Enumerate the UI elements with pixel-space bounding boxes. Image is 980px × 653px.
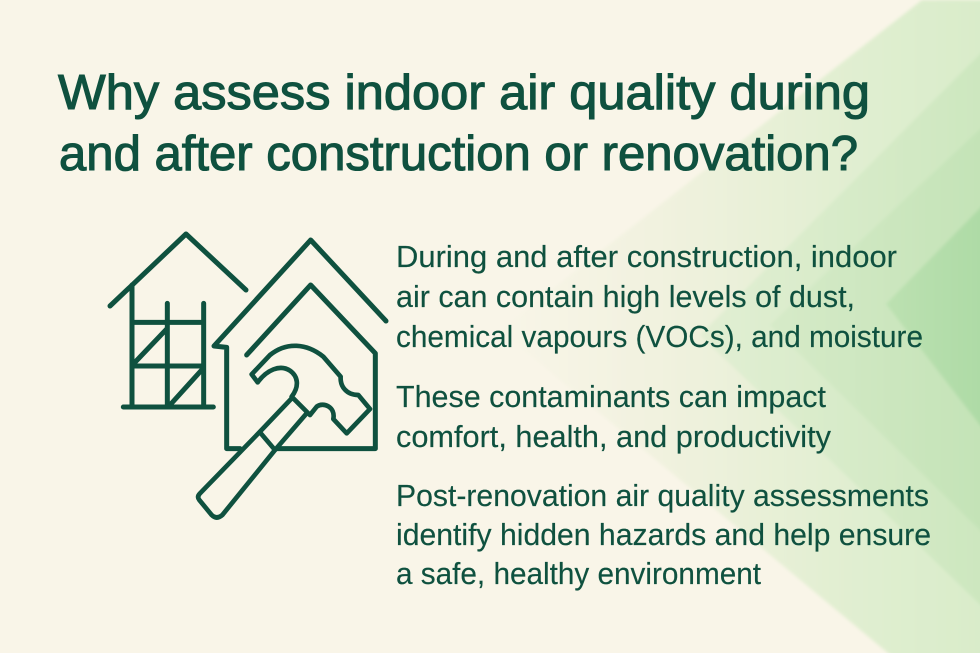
icon: scaffold house <box>110 234 246 407</box>
text block: assessments: identify hidden hazards and help ensure <box>396 517 931 552</box>
title: and after construction or renovation? <box>59 127 858 181</box>
text block: assessments: a safe, healthy environment <box>396 556 761 591</box>
text block: impact: comfort, health, and productivity <box>396 419 831 454</box>
text block: contaminants during construction: air can contain high levels of dust, <box>396 279 855 314</box>
title <box>58 66 870 181</box>
text block: contaminants during construction: chemical vapours (VOCs), and moisture <box>396 319 923 354</box>
text block: impact <box>396 379 831 454</box>
text block: assessments: Post-renovation air quality assessments <box>396 478 929 513</box>
title: Why assess indoor air quality during <box>58 66 870 120</box>
text block: contaminants during construction <box>396 239 923 354</box>
icon: hammer <box>198 346 370 517</box>
text block: impact: These contaminants can impact <box>396 379 826 414</box>
text block: contaminants during construction: During and after construction, indoor <box>396 239 897 274</box>
text block: assessments <box>396 478 931 591</box>
icon: finished house <box>214 240 386 449</box>
icon: construction scaffolding house and hammer <box>110 234 386 517</box>
